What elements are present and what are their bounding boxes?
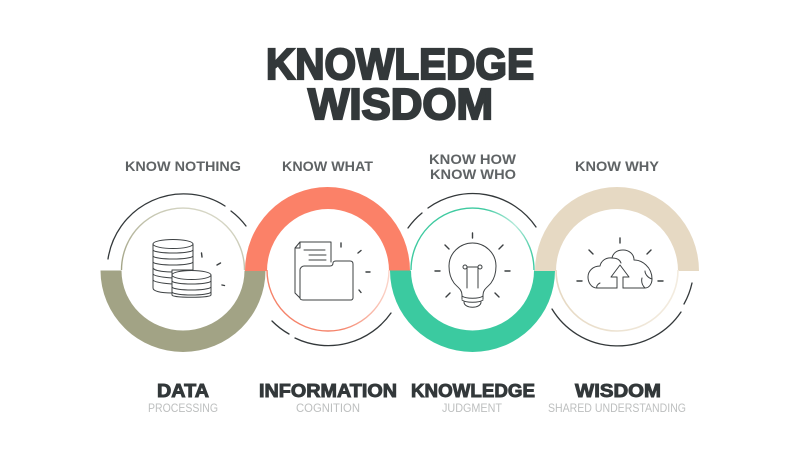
heading: wisdom: WISDOM <box>575 381 661 401</box>
panel: data ring <box>100 194 266 352</box>
thick band: olive lower half <box>100 270 266 352</box>
sub-label: shared understanding: SHARED UNDERSTANDING <box>548 401 686 415</box>
heading: wisdom <box>548 381 686 415</box>
label: know nothing: KNOW NOTHING <box>125 158 241 174</box>
heading: information: INFORMATION <box>259 381 397 401</box>
panel: information ring <box>245 187 410 346</box>
outer thin arcs <box>552 309 681 346</box>
sub-label: processing: PROCESSING <box>148 401 218 415</box>
thick band: coral upper half <box>245 187 410 271</box>
icon: database stacks <box>153 240 224 297</box>
outer thin arcs <box>108 194 225 259</box>
icon: light bulb <box>435 233 510 307</box>
thick band: beige upper half <box>535 187 699 271</box>
outer thin arcs <box>272 321 289 334</box>
sub-label: cognition: COGNITION <box>296 401 360 415</box>
heading: data <box>148 381 218 415</box>
title <box>266 40 534 129</box>
thin inner arc <box>556 270 678 331</box>
label: know what: KNOW WHAT <box>282 158 373 174</box>
thin inner arc <box>411 208 534 270</box>
panel: knowledge ring <box>390 194 555 352</box>
icon: document folder <box>295 242 370 300</box>
thin inner arc <box>267 270 389 331</box>
label: know why: KNOW WHY <box>575 158 660 174</box>
heading: knowledge <box>411 381 535 415</box>
heading: data: DATA <box>157 381 209 401</box>
outer thin arcs <box>408 213 422 228</box>
panel: wisdom ring <box>535 187 699 346</box>
heading: information <box>259 381 397 415</box>
thick band: green lower half <box>390 270 555 352</box>
sub-label: judgment: JUDGMENT <box>442 401 503 415</box>
title: KNOWLEDGE <box>266 40 534 89</box>
heading: knowledge: KNOWLEDGE <box>411 381 535 401</box>
label: know how, know who <box>429 151 517 182</box>
label: know how, know who: KNOW WHO <box>430 166 516 182</box>
thin inner arc <box>122 208 244 270</box>
icon: cloud upload <box>577 238 663 288</box>
title: WISDOM <box>308 80 493 129</box>
label: know how, know who: KNOW HOW <box>429 151 517 167</box>
